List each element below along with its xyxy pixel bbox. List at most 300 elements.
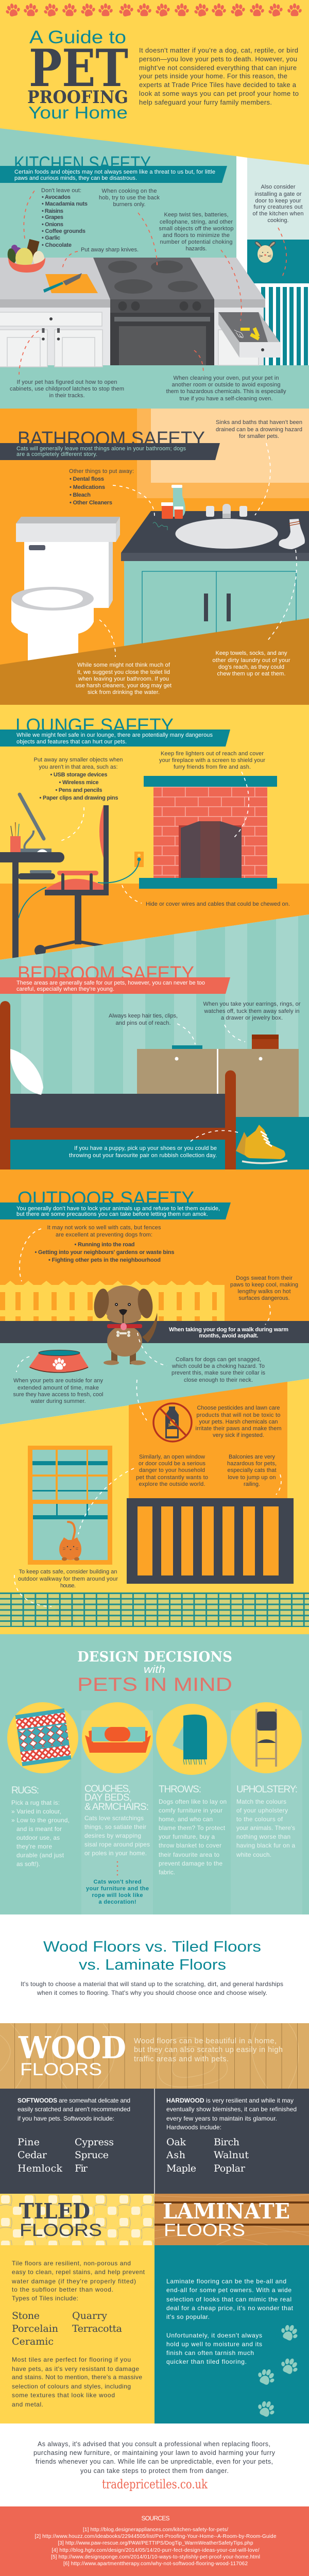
icon: sock: [279, 519, 305, 549]
text: open window: pet that constantly wants to: [136, 1475, 208, 1481]
text: softwoods: if you have pets. Softwoods include:: [18, 2115, 114, 2122]
panel: laminate floors header: LAMINATE: [163, 2199, 290, 2224]
panel: design decisions: [0, 1634, 309, 1914]
text: small objects: cellophane, string, and other: [160, 219, 233, 225]
column: rugs: RUGS:: [11, 1785, 39, 1796]
text: other things: • Dental floss: [70, 476, 104, 482]
panel: wood floors header: Wood floors can be beautiful in a home,: [134, 2037, 277, 2045]
column: throws: throw blanket to cover: [159, 1842, 221, 1849]
text: toilet lid: when leaving your bathroom. If you: [78, 676, 169, 682]
text: childproof latches: If your pet has figured out how to open: [16, 379, 117, 385]
text: oven cleaning: them to hazardous chemicals. This is especially: [166, 388, 286, 395]
text: closing advice: purchasing new furniture, or maintaining your lawn to avoid harming your furry: [33, 2449, 276, 2456]
heading: floors comparison: [43, 1939, 261, 1973]
text: other things: • Bleach: [70, 492, 91, 498]
text: cat walkway: house.: [60, 1583, 76, 1589]
intro paragraph: might've not considered everything that can injure: [139, 64, 297, 72]
counter top: [0, 258, 265, 299]
fireplace: [139, 776, 277, 889]
icon: rug: [7, 1702, 78, 1773]
text: childproof latches: in their tracks.: [49, 393, 84, 399]
column: couches: your furniture and the: [86, 1886, 149, 1892]
icon: paw prints: [255, 2321, 301, 2419]
column: upholstery: having black fur on a: [236, 1842, 295, 1849]
text: fire lighters: Keep fire lighters out of reach and cover: [161, 751, 264, 757]
panel: laminate floors header: FLOORS: [164, 2221, 245, 2240]
text: balconies: [227, 1454, 277, 1487]
text: balconies: especially cats that: [228, 1467, 276, 1473]
text: small objects: number of potential choking: [160, 239, 233, 245]
intro paragraph: It doesn't matter if you're a dog, cat, reptile, or bird: [139, 46, 298, 54]
icon: no poison: [153, 1403, 192, 1442]
column: couches: & ARMCHAIRS:: [84, 1802, 149, 1812]
text: open window: [136, 1454, 208, 1487]
banner: bedroom intro: careful, especially when they're young.: [16, 986, 114, 992]
text: hair ties: Always keep hair ties, clips,: [109, 1013, 178, 1019]
text: collars: which could be a choking hazard. To: [171, 1363, 265, 1369]
panel: laminate floors body: selection of looks that can mimic the real: [166, 2296, 291, 2303]
text: open window: Similarly, an open window: [139, 1454, 205, 1460]
column: throws: prevent damage to the: [159, 1860, 222, 1867]
text: cat walkway: [18, 1569, 118, 1589]
column: throws: your furniture, buy a: [159, 1833, 215, 1840]
heading: lounge safety: LOUNGE SAFETY: [15, 715, 174, 737]
text: hardwoods: HARDWOOD is very resilient and while it may: [166, 2097, 294, 2104]
text: pesticides: your pets. Harsh chemicals can: [199, 1419, 278, 1425]
banner: lounge intro: [0, 730, 230, 747]
intro paragraph: help safeguard your furry family members.: [139, 98, 272, 106]
column: couches: rope will look like: [92, 1892, 143, 1899]
text: fences: are excellent at preventing dogs from:: [56, 1232, 152, 1238]
text: foods list: • Garlic: [42, 235, 60, 241]
text: laundry: dog's reach, as they could: [218, 664, 284, 670]
text: other things: • Other Cleaners: [70, 500, 112, 506]
column: couches: or poles in your home.: [84, 1850, 147, 1857]
text: balconies: railing.: [244, 1481, 260, 1487]
text: closing advice: friends whenever you can. While life can be unpredictable, even for your pets,: [36, 2458, 273, 2465]
text: floors intro: It's tough to choose a material that will stand up to the scratching, dirt, and general hardships: [21, 1980, 283, 1988]
text: hardwoods: eventually show blemishes, it can be refinished: [166, 2106, 297, 2113]
text: small objects list: • Pens and pencils: [56, 787, 102, 793]
panel: tiled floors body: Terracotta: [72, 2323, 122, 2334]
fruit bowl: [7, 239, 45, 273]
text: fences: [35, 1225, 174, 1263]
text: jewelry: a drawer or jewelry box.: [221, 1015, 283, 1021]
brand url: tradepricetiles.co.uk: [102, 2477, 208, 2492]
text: foods list: • Raisins: [42, 208, 63, 214]
column: throws: fabric.: [159, 1869, 175, 1876]
panel: tiled floors body: Quarry: [72, 2310, 107, 2321]
text: small objects: small objects off the worktop: [159, 226, 234, 232]
text: softwoods: Hemlock: [18, 2163, 62, 2174]
panel: lounge safety: [0, 705, 309, 960]
heading: bedroom safety: BEDROOM SAFETY: [18, 963, 194, 985]
heading: design decisions: PETS IN MIND: [77, 1674, 232, 1695]
band: walk warning: When taking your dog for a walk during warm: [169, 1327, 288, 1333]
text: gate: [252, 184, 304, 224]
panel: tiled floors body: have pets, as it's very resistant to damage: [12, 2365, 139, 2372]
text: foods list: [41, 188, 88, 248]
text: toilet lid: While some might not think much of: [77, 662, 170, 668]
column: couches: a decoration!: [99, 1899, 136, 1905]
title: [27, 27, 128, 122]
text: other things: [69, 468, 134, 506]
banner: bathroom intro: are a completely different story.: [16, 451, 97, 457]
text: pesticides: products that will not be toxic to: [197, 1412, 280, 1418]
panel: laminate floors body: hold up well to moisture and its: [166, 2341, 262, 2348]
text: pesticides: Choose pesticides and lawn care: [197, 1405, 280, 1411]
panel: tiled floors body: [0, 2245, 154, 2424]
text: toilet lid: it, we suggest you close the toilet lid: [77, 669, 170, 675]
panel: laminate floors body: end-all for some pet owners. With a wide: [166, 2286, 291, 2294]
text: small objects list: • Paper clips and drawing pins: [39, 795, 118, 801]
text: puppy: throwing out your favourite pair on rubbish collection day.: [69, 1153, 217, 1159]
heading: design decisions: with: [144, 1664, 165, 1675]
floor: [0, 618, 309, 705]
panel: tiled floors body: Tile floors are resilient, non-porous and: [12, 2260, 131, 2267]
text: other things: Other things to put away:: [69, 468, 134, 474]
open drawer with batteries: [218, 312, 281, 358]
text: hardwoods: Hardwoods include:: [166, 2124, 221, 2131]
text: hardwoods: every few years to maintain its glamour.: [166, 2115, 277, 2122]
intro paragraph: look at some ways you can pet proof your home to: [139, 90, 299, 97]
text: toilet lid: sick from drinking the water.: [88, 689, 160, 696]
text: hob: When cooking on the: [102, 188, 157, 194]
heading: outdoor safety: OUTDOOR SAFETY: [18, 1188, 194, 1210]
text: small objects: Keep twist ties, batteries,: [164, 212, 229, 218]
panel: tiled floors body: Stone: [12, 2310, 40, 2321]
arrows: lounge callouts: [59, 772, 249, 903]
panel: wood floors header: traffic areas and with pets.: [134, 2055, 229, 2063]
column: throws: [159, 1784, 227, 1876]
text: hardwoods: Birch: [214, 2137, 239, 2148]
text: foods list: • Chocolate: [42, 242, 72, 248]
column: rugs: Pick a rug that is:: [11, 1799, 60, 1806]
text: open window: explore the outside world.: [139, 1481, 205, 1487]
text: fences: • Fighting other pets in the neighbourhood: [48, 1257, 161, 1263]
column: upholstery: to the colours of: [236, 1816, 283, 1823]
panel: laminate floors body: Unfortunately, it doesn't always: [166, 2332, 262, 2339]
panel: tiled floors body: to the subfloor better than wood.: [12, 2286, 113, 2293]
panel: sources: [1] http://blog.designerappliances.com/kitchen-safety-for-pets/: [83, 2527, 228, 2533]
text: balconies: hazardous for pets,: [227, 1461, 277, 1467]
text: small objects list: you aren't in that area, such as:: [39, 764, 117, 770]
text: closing advice: As always, it's advised that you consult a professional when replacing floors,: [38, 2441, 270, 2448]
column: upholstery: nothing worse than: [236, 1833, 290, 1840]
text: sweat: lengthy walks on hot: [238, 1289, 290, 1295]
text: softwoods: easily scratched and aren't recommended: [18, 2106, 130, 2113]
panel: tiled floors body: easy to clean, repel stains, and help prevent: [12, 2268, 145, 2276]
text: hardwoods: [166, 2097, 297, 2174]
text: softwoods: Spruce: [75, 2149, 109, 2161]
text: gate: installing a gate or: [254, 191, 302, 197]
toilet: [11, 517, 120, 680]
panel: wood floors header: [0, 2023, 309, 2089]
cat walkway: [0, 1592, 309, 1627]
text: foods list: • Macadamia nuts: [42, 201, 88, 207]
text: foods list: • Onions: [42, 222, 63, 228]
panel: tiled floors body: Ceramic: [12, 2336, 54, 2347]
column: throws: blame them? To protect: [159, 1824, 226, 1832]
text: cat walkway: outdoor walkway for them around your: [18, 1576, 118, 1582]
text: closing advice: you can take steps to protect them from danger.: [80, 2467, 229, 2475]
text: softwoods: Fir: [75, 2163, 88, 2174]
text: pesticides: irritate their paws and make them: [196, 1426, 281, 1432]
text: collars: [171, 1357, 266, 1383]
panel: bedroom safety: [0, 914, 309, 1170]
text: small objects list: • Wireless mice: [59, 779, 99, 786]
text: gate: door to keep your: [255, 198, 301, 204]
heading: kitchen safety: KITCHEN SAFETY: [14, 153, 151, 175]
text: jewelry: watches off, tuck them away safely in: [204, 1008, 300, 1014]
wires and socket: [19, 852, 144, 918]
text: fresh water: water during summer.: [30, 1398, 85, 1404]
panel: tiled floors header: TILED: [19, 2199, 90, 2224]
text: pesticides: [196, 1405, 281, 1438]
text: wires: Hide or cover wires and cables that could be chewed on.: [146, 901, 290, 907]
nightstands: [137, 1035, 299, 1118]
text: small objects list: Put away any smaller objects when: [34, 757, 123, 763]
text: hair ties: and pins out of reach.: [115, 1020, 171, 1026]
banner: lounge intro: objects and features that can hurt our pets.: [16, 739, 127, 745]
icon: trainers: [236, 1125, 287, 1163]
text: fire lighters: [159, 751, 265, 770]
banner: outdoor intro: but there are some precautions you can take before letting them run amok.: [16, 1211, 208, 1217]
column: rugs: [11, 1785, 70, 1868]
column: throws: THROWS:: [159, 1784, 201, 1795]
text: sinks: drained can be a drowning hazard: [216, 427, 302, 433]
text: softwoods: [18, 2097, 130, 2174]
panel: tiled floors header: [0, 2194, 154, 2245]
text: puppy: [69, 1145, 217, 1159]
text: laundry: [212, 650, 290, 677]
column: rugs: as soft!).: [16, 1860, 40, 1868]
panel: laminate floors body: Laminate flooring can be the be-all and: [166, 2278, 286, 2285]
text: gate: Also consider: [261, 184, 296, 190]
text: laundry: chew them up or eat them.: [217, 671, 285, 677]
paw print row: [4, 2, 302, 18]
text: collars: prevent this, make sure their collar is: [171, 1370, 266, 1376]
vanity unit: [121, 504, 309, 669]
text: foods list: • Grapes: [42, 214, 63, 221]
panel: laminate floors header: [154, 2194, 309, 2245]
panel: sources: [6] http://www.apartmenttherapy.com/why-not-softwood-flooring-wood-117062: [63, 2561, 248, 2567]
panel: sources: [3] http://www.paw-rescue.org/PAW/PETTIPS/DogTip_WarmWeatherSafetyTips.php: [58, 2540, 253, 2546]
column: upholstery: [236, 1784, 298, 1858]
text: oven cleaning: another room or outside to avoid exposing: [172, 382, 280, 388]
text: gate: of the kitchen when: [252, 211, 304, 217]
panel: tiled floors body: some textures that look like wood: [12, 2392, 115, 2399]
text: other things: • Medications: [70, 484, 105, 490]
banner: outdoor intro: [0, 1202, 231, 1219]
heading: design decisions: [77, 1649, 232, 1695]
header background: [0, 0, 309, 170]
panel: wood floors header: FLOORS: [20, 2060, 102, 2079]
icon: water bowl: [29, 1350, 89, 1372]
panel: laminate floors body: deal for a cheap price, it's no wonder that: [166, 2304, 294, 2312]
panel: laminate floors body: [154, 2245, 309, 2424]
icon: dental floss: [153, 522, 167, 530]
panel: sources: SOURCES: [141, 2515, 170, 2522]
arrows: bedroom callouts: [177, 1024, 245, 1142]
banner: lounge intro: While we might feel safe in our lounge, there are potentially many dangerous: [16, 732, 213, 738]
column: rugs: » Low to the ground,: [11, 1817, 70, 1824]
column: couches: sisal rope around pipes: [84, 1841, 150, 1848]
text: gate: cooking.: [268, 217, 288, 224]
text: fresh water: When your pets are outside for any: [13, 1378, 103, 1384]
panel: tiled floors body: and metal.: [12, 2401, 43, 2408]
icon: dog: [92, 1285, 157, 1365]
text: sweat: surfaces dangerous.: [239, 1295, 289, 1301]
heading: floors comparison: Wood Floors vs. Tiled Floors: [43, 1939, 261, 1955]
text: collars: close enough to their neck.: [184, 1377, 253, 1383]
icon: rabbit: [255, 242, 275, 263]
text: childproof latches: cabinets, use childproof latches to stop them: [10, 386, 124, 392]
column: rugs: outdoor use, as: [16, 1834, 60, 1841]
text: closing advice: [33, 2441, 276, 2475]
desk with monitor: [0, 794, 64, 958]
panel: laminate floors body: finish can often tarnish much: [166, 2349, 254, 2357]
title: A Guide to: [29, 27, 126, 47]
text: open window: or door could be a serious: [139, 1461, 206, 1467]
column: rugs: they're more: [16, 1843, 52, 1850]
text: small objects: [159, 212, 234, 252]
text: jewelry: [203, 1001, 301, 1021]
column: rugs: durable (and just: [16, 1852, 64, 1859]
text: puppy: If you have a puppy, pick up your shoes or you could be: [74, 1145, 217, 1151]
text: laundry: other dirty laundry out of your: [212, 657, 290, 664]
column: throws: comfy furniture in your: [159, 1807, 222, 1814]
arrows: kitchen callouts: [19, 191, 286, 375]
text: hardwoods: Walnut: [214, 2149, 249, 2161]
banner: bathroom intro: [0, 443, 220, 460]
panel: softwoods and hardwoods: [0, 2089, 309, 2194]
cabinets: [0, 308, 264, 367]
panel: outdoor safety: [0, 1170, 309, 1634]
text: gate: furry creatures out: [253, 204, 303, 210]
text: oven cleaning: [166, 375, 286, 402]
heading: bathroom safety: BATHROOM SAFETY: [18, 428, 205, 450]
text: floors intro: [21, 1980, 283, 1996]
banner: kitchen intro: [0, 166, 227, 183]
panel: kitchen safety: [0, 128, 309, 409]
intro paragraph: [139, 46, 299, 106]
text: fire lighters: furry friends from fire and ash.: [174, 764, 251, 770]
panel: tiled floors body: Most tiles are perfect for flooring if you: [12, 2356, 131, 2363]
text: fresh water: sure they have access to fresh, cool: [13, 1392, 103, 1398]
text: sweat: paws to keep cool, making: [230, 1282, 298, 1288]
column: upholstery: of your upholstery: [236, 1807, 288, 1814]
text: open window: danger to your household: [139, 1467, 205, 1473]
text: hob: [99, 188, 160, 208]
text: fences: • Running into the road: [74, 1242, 135, 1248]
text: laundry: Keep towels, socks, and any: [215, 650, 287, 656]
arrows: outdoor callouts: [14, 1229, 281, 1606]
text: fresh water: [13, 1378, 103, 1404]
panel: tiled floors body: Porcelain: [12, 2323, 58, 2334]
icon: chair: [231, 1702, 302, 1773]
banner: bedroom intro: These areas are generally safe for our pets, however, you can never be too: [16, 980, 205, 986]
column: rugs: » Varied in colour,: [11, 1808, 61, 1815]
column: throws: home, and who can: [159, 1816, 213, 1823]
text: hardwoods: Ash: [166, 2149, 185, 2161]
text: small objects: hazards.: [185, 246, 207, 252]
cooker: [93, 258, 214, 365]
text: sinks: for smaller pets.: [239, 433, 279, 439]
floor and bed: [0, 1001, 309, 1170]
title: PROOFING: [27, 87, 128, 108]
panel: wood floors header: WOOD: [18, 2030, 126, 2065]
text: hob: burners only.: [113, 201, 145, 208]
panel: tiled floors body: Types of Tiles include:: [12, 2295, 78, 2302]
panel: wood floors header: but they can also scratch up easily in high: [134, 2046, 283, 2054]
window: [137, 409, 309, 498]
lawn and yard: [0, 1343, 309, 1425]
column: upholstery: UPHOLSTERY:: [236, 1784, 298, 1795]
text: hob: hob, try to use the back: [99, 195, 160, 201]
balcony railing: [127, 1498, 294, 1584]
column: couches: Cats love scratchings: [84, 1815, 144, 1822]
column: couches: Cats won't shred: [94, 1879, 141, 1885]
text: small objects: and floors to minimize the: [163, 232, 230, 239]
intro paragraph: person—you love your pets to death. However, you: [139, 55, 297, 63]
text: cat walkway: To keep cats safe, consider building an: [19, 1569, 117, 1575]
banner: kitchen intro: Certain foods and objects may not always seem like a threat to us but, for little: [14, 169, 215, 175]
text: foods list: • Coffee grounds: [42, 228, 85, 234]
panel: sources: [0, 2506, 309, 2576]
column: couches: desires by wrapping: [84, 1832, 141, 1839]
column: rugs: and is meant for: [16, 1825, 62, 1833]
text: pesticides: very sick if ingested.: [213, 1432, 264, 1438]
text: oven cleaning: true if you have a self-cleaning oven.: [179, 396, 273, 402]
office chair: [35, 805, 109, 956]
text: balconies: love to jump up on: [228, 1475, 276, 1481]
window with cat: [28, 1446, 112, 1565]
column: couches: things, so satiate their: [84, 1823, 146, 1831]
column: upholstery: your animals. There's: [236, 1824, 295, 1832]
text: sinks: Sinks and baths that haven't been: [216, 419, 302, 426]
intro paragraph: experts at Trade Price Tiles have decided to take a: [139, 81, 297, 89]
heading: floors comparison: vs. Laminate Floors: [79, 1957, 226, 1973]
panel: laminate floors body: quicker than tiled flooring.: [166, 2358, 247, 2365]
text: floors intro: when it comes to flooring. That's why you should choose once and choose wisely.: [37, 1989, 267, 1996]
text: softwoods: SOFTWOODS are somewhat delicate and: [18, 2097, 130, 2104]
text: fire lighters: your fireplace with a screen to shield your: [159, 757, 265, 764]
fence: [0, 1281, 225, 1321]
text: knives: Put away sharp knives.: [81, 247, 139, 253]
text: foods list: Don't leave out:: [41, 188, 81, 194]
panel: tiled floors header: FLOORS: [20, 2221, 102, 2240]
text: sweat: Dogs sweat from their: [236, 1275, 293, 1281]
title: Your Home: [28, 103, 128, 122]
text: foods list: • Avocados: [42, 194, 71, 200]
banner: outdoor intro: You generally don't have to lock your animals up and refuse to let them outside,: [16, 1206, 220, 1212]
text: softwoods: Pine: [18, 2137, 40, 2148]
text: fences: It may not work so well with cats, but fences: [47, 1225, 161, 1231]
icon: couch: [82, 1702, 153, 1773]
text: oven cleaning: When cleaning your oven, put your pet in: [173, 375, 279, 381]
text: fences: • Getting into your neighbours' gardens or waste bins: [35, 1249, 174, 1256]
column: couches: COUCHES,: [84, 1784, 131, 1794]
heading: design decisions: DESIGN DECISIONS: [77, 1649, 232, 1665]
panel: bathroom safety: [0, 409, 309, 705]
intro paragraph: your pets inside your home. For this reason, the: [139, 72, 287, 80]
text: softwoods: Cypress: [75, 2137, 114, 2148]
text: fresh water: extended amount of time, make: [18, 1385, 99, 1391]
panel: sources: [5] http://www.designsponge.com/2014/01/10-ways-to-stylishly-pet-proof-your-home.html: [51, 2554, 260, 2560]
text: toilet lid: [76, 662, 171, 696]
title: PET: [29, 39, 128, 98]
